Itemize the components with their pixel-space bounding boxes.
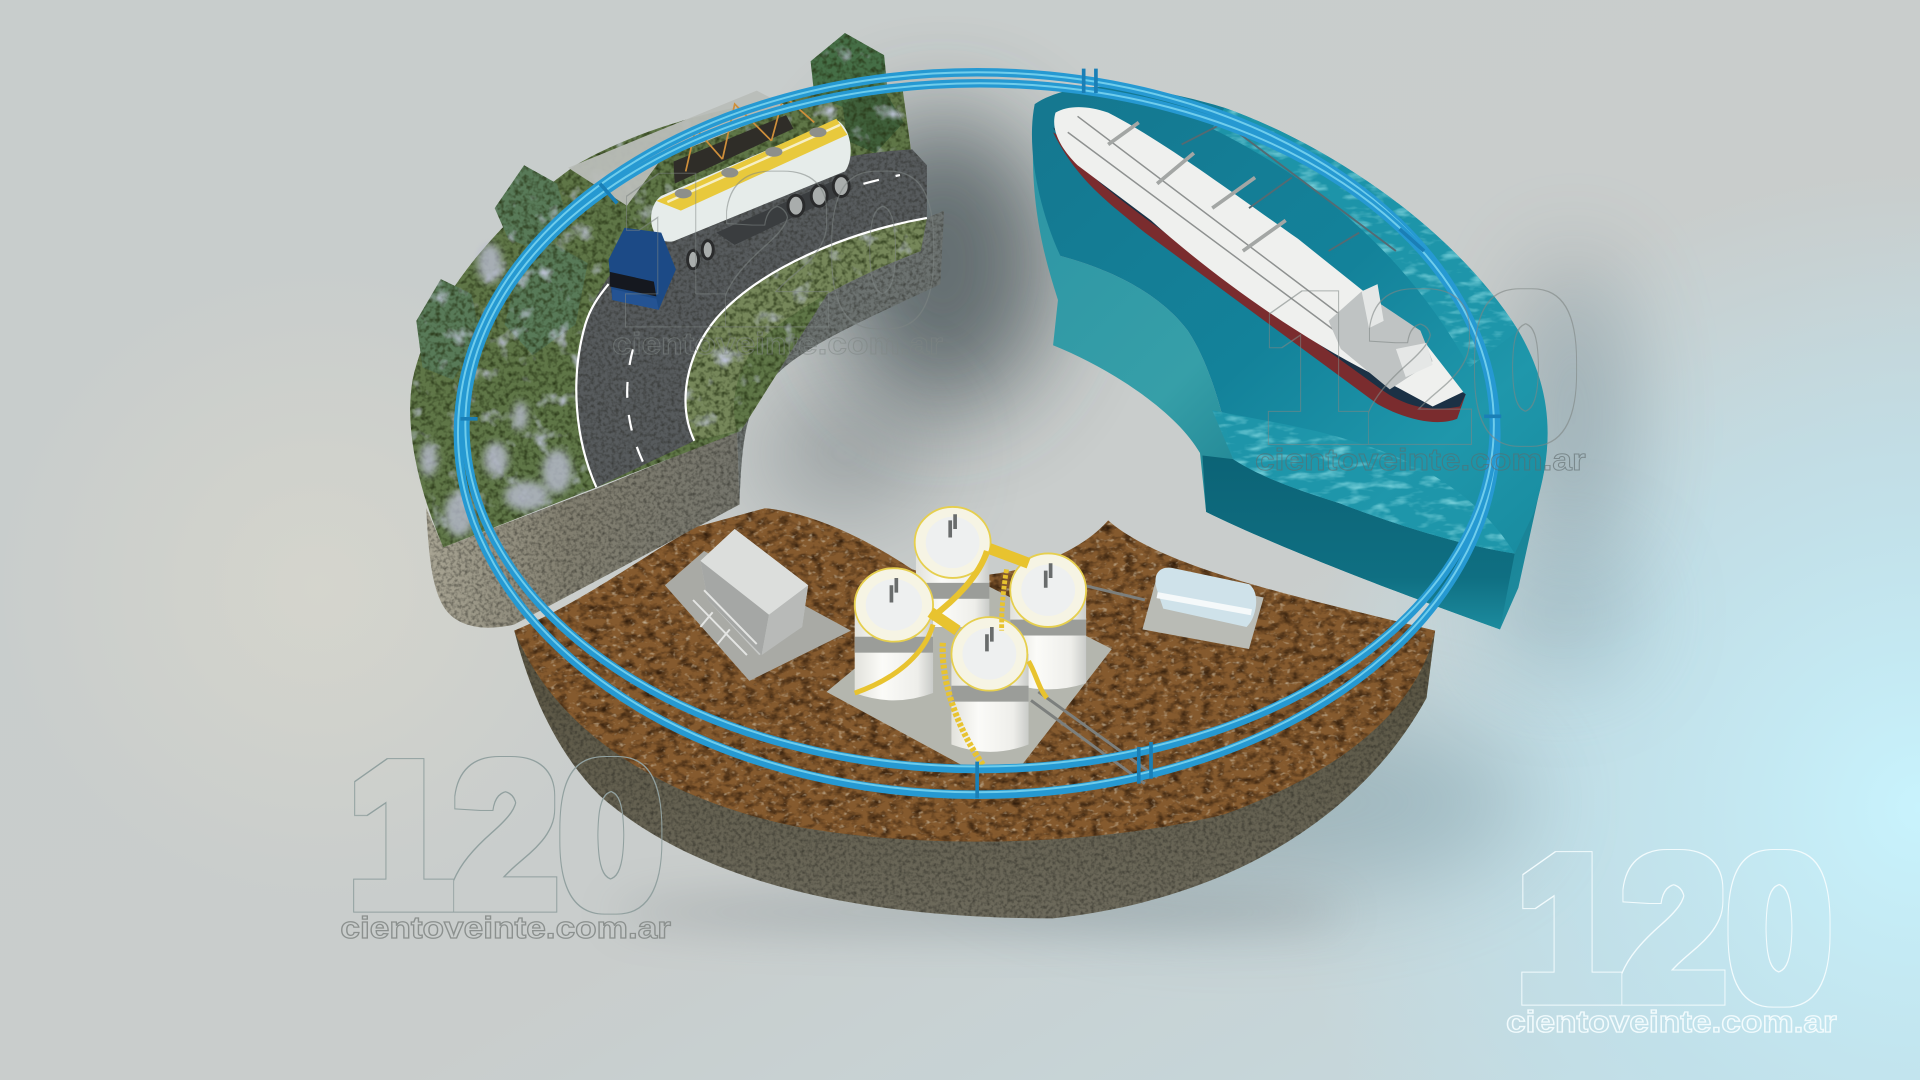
rear rack bbox=[673, 115, 793, 184]
road markings bbox=[576, 175, 927, 487]
dirt side bbox=[514, 631, 1435, 918]
pipe couplings bbox=[460, 69, 1501, 798]
water surface bbox=[1032, 87, 1548, 553]
ground pipes bbox=[1031, 585, 1157, 784]
road bbox=[576, 149, 927, 487]
storage tanks bbox=[855, 507, 1086, 765]
boom lines bbox=[1182, 122, 1396, 251]
ship deck bbox=[1054, 107, 1463, 407]
truck bbox=[609, 96, 851, 310]
cast shadows bbox=[612, 116, 1635, 932]
vegetation surface bbox=[410, 88, 912, 547]
building slab bbox=[665, 551, 851, 681]
tank: left bbox=[855, 568, 933, 700]
horizontal tank bbox=[1142, 568, 1264, 649]
building bbox=[693, 529, 808, 655]
rock outer side bbox=[426, 431, 740, 628]
pale concrete patch bbox=[568, 91, 790, 206]
water side wall bbox=[1033, 116, 1545, 629]
blue pipeline ring bbox=[458, 69, 1501, 798]
outer pipe bbox=[458, 72, 1496, 795]
chassis bbox=[716, 181, 851, 245]
road bank bbox=[686, 218, 927, 441]
tank: back bbox=[915, 507, 991, 627]
lower water wall bbox=[1202, 456, 1515, 629]
watermark: bottom right: cientoveinte.com.ar bbox=[1506, 1005, 1837, 1039]
watermark: centre left: cientoveinte.com.ar bbox=[612, 327, 943, 361]
tank slab bbox=[827, 576, 1112, 771]
trees bbox=[416, 33, 904, 380]
deck lines bbox=[1068, 116, 1353, 331]
dirt surface bbox=[514, 508, 1435, 842]
panel: tank farm section bbox=[514, 507, 1435, 918]
watermark: centre right: 120 bbox=[1262, 252, 1578, 482]
back wall bbox=[884, 88, 912, 159]
superstructure bbox=[1329, 291, 1433, 389]
yellow stairs bbox=[855, 549, 1047, 765]
ship hull bbox=[1053, 132, 1466, 422]
orange supports bbox=[686, 96, 814, 171]
watermark: bottom right: 120 bbox=[1516, 813, 1832, 1043]
tank: right bbox=[1010, 553, 1086, 689]
cab bbox=[609, 228, 676, 310]
pale lichen patches bbox=[420, 244, 572, 536]
inner rock wall bbox=[734, 211, 944, 504]
panel: sea section bbox=[1032, 87, 1548, 629]
building stairs bbox=[693, 590, 757, 655]
watermark: bottom left: cientoveinte.com.ar bbox=[340, 911, 671, 945]
watermark: centre left: 120 bbox=[620, 135, 936, 365]
tank hatches bbox=[675, 127, 827, 198]
tanker bbox=[651, 120, 851, 242]
tanker ship bbox=[1053, 107, 1466, 422]
panel: mountain road section bbox=[410, 33, 944, 628]
trailer wheels bbox=[688, 176, 849, 269]
tank: front bbox=[951, 617, 1029, 752]
watermark: centre right: cientoveinte.com.ar bbox=[1255, 443, 1586, 477]
wave texture bbox=[1212, 108, 1518, 553]
watermark: bottom left: 120 bbox=[348, 720, 664, 950]
inner pipe bbox=[465, 83, 1494, 769]
